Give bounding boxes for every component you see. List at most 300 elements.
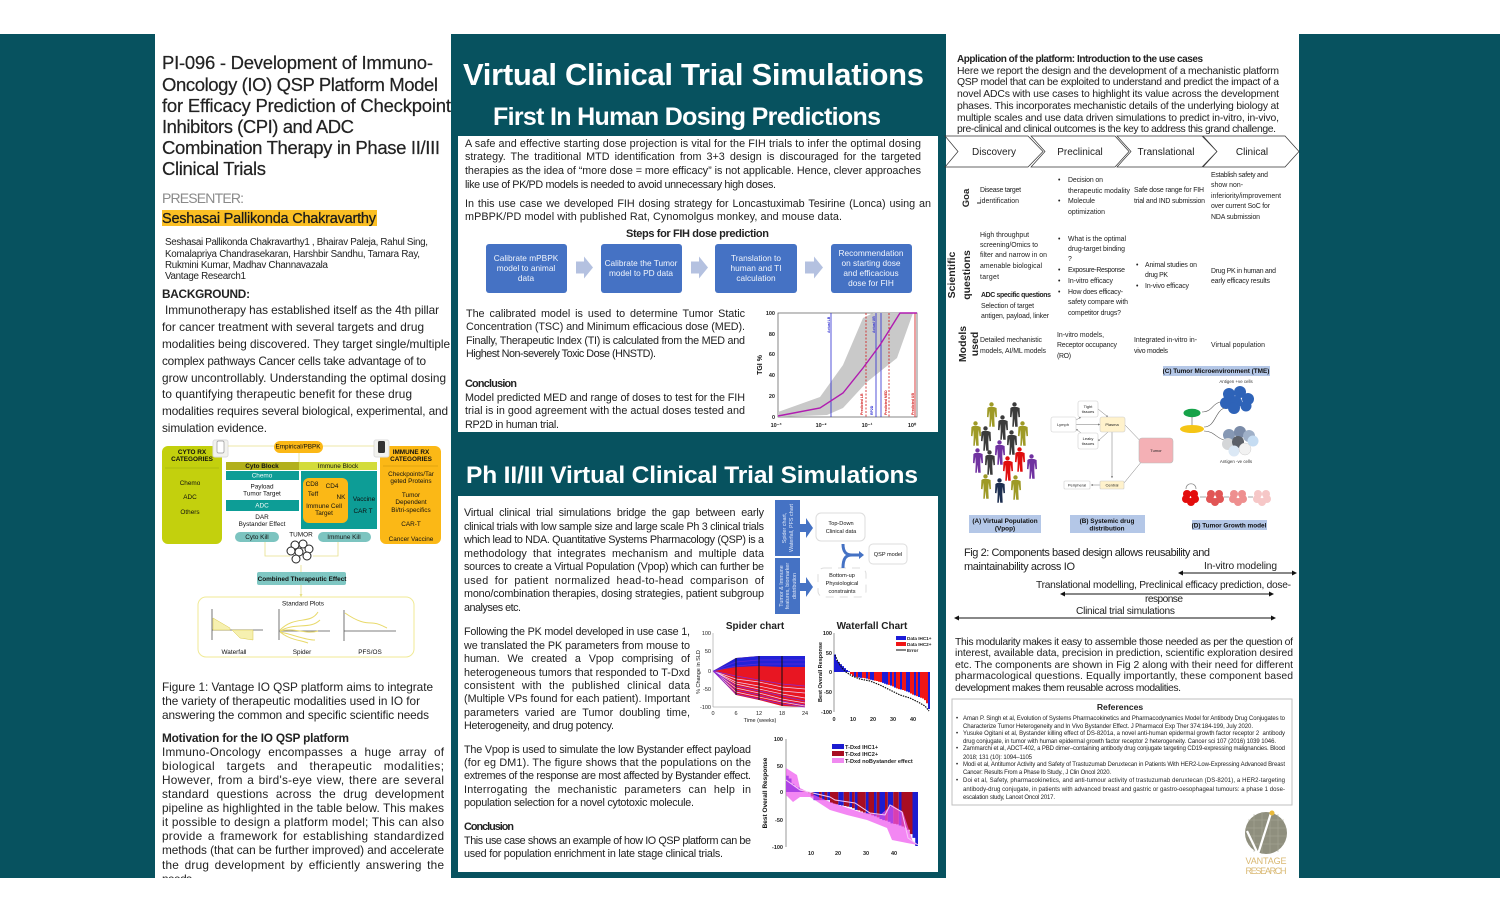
arrow (576, 256, 593, 278)
conclusion text: RP2D in human trial. (465, 419, 559, 431)
intro text: therapies as the idea of “more dose = more efficacy” is not applicable. Hence, clever approaches (465, 165, 922, 177)
row: models used (957, 326, 1265, 362)
row: models used: used (969, 332, 981, 356)
application text (957, 66, 1279, 135)
range: in-vitro modeling (1179, 561, 1296, 573)
row: scientific questions: In-vitro efficacy (1068, 278, 1114, 285)
chart: waterfall: 0 (832, 717, 836, 723)
row: scientific questions: questions (961, 250, 973, 300)
title: PI-096 - Development of Immuno- (162, 52, 433, 73)
logo: Vantage Research: VANTAGE (1246, 856, 1286, 866)
motivation text (162, 745, 445, 886)
step 2 (601, 244, 682, 293)
label B (1070, 515, 1145, 533)
chart: spider: % Change in SLD (696, 650, 702, 694)
chart: spider: 0 (708, 669, 711, 675)
cyto block: Cyto Block (245, 463, 279, 470)
chart: waterfall (818, 621, 932, 723)
PK model text: we translated the PK parameters from mouse to (463, 640, 690, 652)
motivation text: Immuno-Oncology encompasses a huge array of (162, 745, 445, 759)
sub heading: Ph II/III: Ph II/III Virtual Clinical Trial Simulations (466, 462, 918, 489)
label A: (A) Virtual Population (972, 518, 1038, 525)
references box: Yusuke Ogitani et al, Bystander killing effect of DS-8201a, a novel anti-human epidermal growth factor receptor 2 antibody (963, 731, 1285, 737)
bystander text: (for eg DM1). The figure shows that the populations on the (464, 757, 751, 769)
motivation text: the drug development by efficiently answering the (162, 858, 444, 872)
step 3: calculation (736, 273, 776, 283)
figure 1 caption (162, 680, 433, 722)
figure 1 caption: Figure 1: Vantage IO QSP platform aims to integrate (162, 680, 433, 694)
chart: TGI vs dose: 10⁻¹ (862, 422, 873, 429)
step 4: and efficacious (843, 268, 899, 278)
chart: bystander waterfall: 30 (863, 851, 869, 857)
row: scientific questions: early efficacy results (1211, 278, 1271, 285)
chart: TGI vs dose: Actual UB (872, 316, 876, 333)
application heading: Application of the platform: Introduction to the use cases (957, 54, 1203, 65)
references box: Doi et al, Safety, pharmacokinetics, and anti-tumour activity of trastuzumab deruxtecan (DS-8201), a HER2-targeting (963, 778, 1285, 784)
chart: TGI vs dose: Predicted UB (911, 393, 915, 415)
chart: bystander waterfall: 20 (835, 851, 841, 857)
chart: waterfall: Waterfall Chart (837, 621, 908, 632)
chevron: preclinical: Preclinical (1057, 147, 1103, 158)
modularity text: interest, available data, precision in prediction, scientific exploration desired (955, 648, 1293, 659)
references box (952, 699, 1292, 805)
row: scientific questions: screening/Omics to (980, 242, 1038, 249)
range: clinical trial simulations: Clinical trial simulations (1076, 606, 1175, 617)
references box: • (956, 716, 958, 722)
background text: modalities being discovered. They target single/multiple (162, 337, 450, 351)
cyto block: Bystander Effect (239, 521, 286, 528)
row: scientific questions: amenable biological (980, 263, 1042, 270)
row: scientific questions: • (1058, 267, 1061, 274)
references box: drug conjugate, in tumor with human epidermal growth factor receptor 2 heterogeneity. Cancer sci 107 (2016) 1039 1046. (963, 739, 1276, 745)
row: models used: Receptor occupancy (1057, 342, 1118, 349)
references box: antibody-drug conjugate, in patients with advanced breast and gastric or gastro-oesophageal tumours: a phase 1 dose- (963, 787, 1285, 793)
row: goal: • (1058, 198, 1061, 205)
label D: (D) Tumor Growth model (1192, 522, 1267, 530)
range: translational modelling: Translational modelling, Preclinical efficacy prediction, dose- (1036, 580, 1291, 591)
title: Oncology (IO) QSP Platform Model (162, 74, 438, 95)
chart: bystander waterfall: T-Dxd IHC1+ (845, 745, 879, 751)
conclusion text: trial is in good agreement with the actual doses tested and (465, 405, 745, 417)
bystander text: extremes of the response are most affected by Bystander effect. (464, 770, 751, 782)
label D (1192, 520, 1267, 530)
systemic distribution network: Tight (1084, 404, 1093, 409)
bystander text: Interrogating the mechanistic parameters can help in (464, 784, 751, 796)
spider mini plot (279, 609, 330, 656)
row: scientific questions: ADC specific questions (981, 292, 1051, 299)
chevron: discovery: Discovery (972, 147, 1016, 158)
chart: bystander waterfall: Best Overall Response (762, 757, 769, 828)
chart: spider: 100 (702, 631, 711, 637)
immune rx categories: geted Proteins (390, 478, 432, 485)
icon: immune drug bottle (374, 440, 389, 457)
row: scientific questions: Animal studies on (1145, 262, 1197, 269)
calibrated model text: The calibrated model is used to determine Tumor Static (466, 308, 746, 320)
flow: FIH dose steps (486, 244, 912, 293)
conclusion (464, 821, 751, 860)
conclusion text (465, 378, 745, 431)
vct intro text: used for patient normalized head-to-head comparison of (464, 575, 765, 587)
chevron: discovery (945, 136, 1043, 167)
vct intro text: analyses etc. (464, 602, 521, 614)
PK model text (463, 626, 691, 732)
chevron: translational (1117, 136, 1217, 167)
bystander text: The Vpop is used to simulate the low Bystander effect payload (464, 744, 751, 756)
cyto rx categories: CYTO RX (178, 449, 207, 456)
chart: bystander waterfall: -100 (772, 845, 783, 851)
chart: spider: 18 (779, 711, 785, 717)
empirical/PBPK pill (274, 441, 323, 453)
chart: TGI vs dose: 80 (769, 332, 775, 338)
PK model text: Heterogeneity, and drug potency. (464, 720, 614, 732)
row: scientific questions: How does efficacy- (1068, 289, 1123, 296)
immune rx categories: Bi/tri-specifics (391, 507, 431, 514)
calibrated model text: Concentration (TSC) and Minimum efficacious dose (MED). (466, 321, 745, 333)
figure 2 caption (964, 547, 1210, 573)
label B: distribution (1089, 526, 1125, 532)
presenter label: PRESENTER: (162, 190, 244, 206)
row: goal: Decision on (1068, 177, 1103, 184)
logo: Vantage Research (1245, 810, 1287, 876)
immune block: Immune Block (318, 463, 359, 470)
references box: escalation study, Lancet Oncol 2017. (963, 795, 1055, 801)
PK model text: (Multiple VPs found for each patient). Important (464, 693, 690, 705)
row: scientific questions: In-vivo efficacy (1145, 283, 1190, 290)
row: goal: Goa (961, 188, 972, 207)
modularity text: etc. The components are shown in Fig 2 along with their need for different (955, 660, 1293, 671)
arrow (691, 256, 708, 278)
systemic distribution network: Central (1106, 482, 1119, 488)
immune kill pill (318, 532, 371, 542)
intro text (465, 138, 931, 223)
vct intro text: sources to create a Virtual Population (Vpop) which can further be (464, 561, 764, 573)
row: scientific questions: filter and narrow in on (980, 252, 1047, 259)
chart: bystander waterfall: 10 (808, 851, 814, 857)
immune rx categories: Cancer Vaccine (389, 536, 434, 543)
modularity text (955, 637, 1293, 694)
chart: waterfall: Data IHC1+ (907, 636, 932, 641)
panel: first in human (458, 136, 938, 432)
row: goal: trial and IND submission (1134, 198, 1205, 205)
chart: TGI vs dose: Actual LB (827, 316, 831, 333)
diagram: top-down and bottom-up QSP: Physiological (826, 581, 858, 587)
row: scientific questions: Exposure-Response (1068, 267, 1125, 274)
vct intro text: Virtual clinical trial simulations bridge the gap between early (464, 507, 765, 519)
references box: Zammarchi et al, ADCT-402, a PBD dimer–containing antibody drug conjugate targeting CD19-expressing malignancies. Blood (963, 746, 1285, 752)
title: Clinical Trials (162, 158, 266, 179)
row: scientific questions: safety compare with (1068, 299, 1128, 306)
vct intro text (463, 507, 765, 614)
step 3: Translation to (731, 253, 781, 263)
label B: (B) Systemic drug (1080, 518, 1134, 525)
row: goal: Safe dose range for FIH (1134, 187, 1204, 194)
intro text: mPBPK/PD model with published Rat, Cynomolgus monkey, and mouse data. (465, 211, 842, 223)
chart: TGI vs dose: 10⁻² (816, 422, 827, 429)
step 3 (715, 244, 797, 293)
waterfall mini plot: Waterfall (222, 649, 246, 656)
row: scientific questions: target (980, 274, 999, 281)
figure 1 caption: the variety of therapeutic modalities used in IO for (162, 694, 420, 708)
icon: cyto drug bottle (213, 440, 228, 457)
row: goal: Disease target (980, 187, 1021, 194)
application text: pre-clinical and clinical outcomes is the key to address this grand challenge. (957, 124, 1276, 135)
step 1: model to animal (497, 263, 555, 273)
calibrated model text: Finally, Therapeutic Index (TI) is calculated from the MED and (466, 335, 745, 347)
references box: • (956, 778, 958, 784)
immune block (299, 462, 377, 529)
row: goal: Molecule (1068, 198, 1095, 205)
conclusion: Conclusion (464, 821, 514, 833)
systemic distribution network: Tumor (1150, 448, 1162, 453)
label A: (Vpop) (995, 526, 1015, 532)
authors: Vantage Research1 (165, 271, 246, 282)
modularity text: This modularity makes it easy to assemble those needed as per the question of (955, 637, 1293, 648)
logo: Vantage Research: RESEARCH (1246, 866, 1286, 876)
motivation text: biological targets and therapeutic modalities; (162, 759, 444, 773)
motivation heading: Motivation for the IO QSP platform (162, 731, 349, 745)
figure 1: platform diagram (162, 440, 441, 657)
label C: (C) Tumor Microenvironment (TME) (1163, 368, 1269, 375)
background text: complex pathways Cancer cells take advantage of to (162, 354, 426, 368)
row: models used: vivo models (1134, 348, 1169, 355)
diagram: top-down and bottom-up QSP: constraints (828, 589, 856, 595)
chart: TGI vs dose: Predicted MED (884, 390, 888, 415)
chart: TGI vs dose: 0 (772, 415, 775, 421)
references box: Characterize Tumor Heterogeneity and In Vivo Bystander Effect. J Pharmacol Exp Ther 374:184-199, July 2020. (963, 724, 1253, 730)
chart: TGI vs dose: 20 (769, 394, 775, 400)
intro text: A safe and effective starting dose projection is vital for the FIH trials to infer the optimal dosing (465, 138, 921, 150)
chart: bystander waterfall: 40 (891, 851, 897, 857)
vct intro text: methodology that integrates mechanism and multiple data (464, 548, 764, 560)
immune rx categories: Dependent (395, 499, 427, 506)
systemic distribution network: Plasma (1105, 422, 1119, 427)
panel: right column (945, 34, 1299, 878)
application text: phases. This incorporates mechanistic details of the underlying biology at (957, 101, 1279, 112)
range: translational modelling: response (1145, 594, 1183, 605)
PFS/OS mini plot: PFS/OS (358, 649, 382, 656)
row: scientific questions: Selection of target (981, 303, 1034, 310)
diagram: top-down and bottom-up QSP: Tumor & Immune (779, 565, 785, 607)
cyto block: DAR (255, 514, 269, 521)
chart: bystander waterfall (762, 737, 918, 857)
chart: bystander waterfall: T-Dxd noBystander effect (845, 759, 913, 765)
step 2: Calibrate the Tumor (605, 258, 678, 268)
standard plots: Standard Plots (282, 600, 324, 608)
step 4: on starting dose (841, 258, 901, 268)
tumor icon: TUMOR (289, 532, 313, 538)
tumor growth cells (1182, 484, 1271, 506)
row: goal: over current SoC for (1211, 203, 1271, 210)
immune block: Immune Cell (306, 503, 342, 510)
chart: waterfall: 30 (890, 717, 896, 723)
references box: References (1097, 702, 1143, 712)
cyto rx categories (162, 446, 222, 544)
step 1: Calibrate mPBPK (494, 253, 559, 263)
references box: • (956, 762, 958, 768)
chart: bystander waterfall: T-Dxd IHC2+ (845, 752, 879, 758)
chevron: clinical: Clinical (1236, 147, 1268, 158)
chart: spider: 50 (705, 649, 711, 655)
cyto rx categories: ADC (183, 494, 197, 501)
combined therapeutic effect (257, 572, 347, 585)
bystander text: population selection for a novel cytotoxic molecule. (464, 797, 694, 809)
row: goal (961, 172, 1281, 221)
spider mini plot: Spider (293, 649, 312, 656)
cyto block: Payload (250, 484, 274, 490)
tumor microenvironment: Antigen -ve cells (1220, 459, 1253, 464)
motivation text: standard questions across the drug development (162, 787, 445, 801)
application text: multiple scales and use data driven simulations to predict in-vitro, in-vivo, (957, 113, 1279, 124)
tumor microenvironment: Antigen +ve cells (1219, 379, 1253, 384)
application text: novel ADCs with use cases to highlight its value across the development (957, 89, 1279, 100)
row: goal: therapeutic modality (1068, 188, 1131, 195)
arrows to empirical pill (228, 446, 374, 462)
diagram: top-down and bottom-up QSP: Bottom-up (829, 573, 855, 579)
row: goal: show non- (1211, 182, 1243, 189)
row: models used: Integrated in-vitro in- (1134, 337, 1197, 344)
chart: waterfall: 10 (850, 717, 856, 723)
connector arrows (265, 542, 338, 597)
chart: waterfall: 50 (826, 651, 832, 657)
step 4: Recommendation (838, 248, 904, 258)
range: translational modelling (1036, 580, 1291, 605)
chart: spider: -100 (700, 705, 711, 711)
row: scientific questions: competitor drugs? (1068, 310, 1121, 317)
row: scientific questions: antigen, payload, linker (981, 313, 1050, 320)
chart: spider (696, 621, 808, 724)
PK model text: parameters varied are Tumor doubling time, (464, 707, 690, 719)
vct intro text: clinical trials with low sample size and large scale Ph 3 clinical trials (464, 521, 765, 533)
chart: spider: -50 (703, 687, 711, 693)
motivation text: methods (that can be further improved) and accelerate (162, 843, 444, 857)
cyto block: ADC (255, 502, 269, 510)
combined therapeutic effect: Combined Therapeutic Effect (258, 576, 347, 583)
chart: waterfall: 100 (823, 631, 832, 637)
chart: waterfall: -50 (824, 690, 832, 696)
chart: bystander waterfall: -50 (775, 818, 783, 824)
authors: Komalapriya Chandrasekaran, Harshbir Sandhu, Tamara Ray, (165, 249, 420, 260)
diagram: top-down and bottom-up QSP: Spider chart, (782, 512, 788, 543)
references box: • (956, 746, 958, 752)
chart: waterfall: -100 (821, 710, 832, 716)
step 3: human and TI (730, 263, 782, 273)
chart: TGI vs dose: RP2D (870, 405, 874, 415)
systemic distribution network: tissues (1082, 441, 1094, 446)
chart: spider: Spider chart (726, 621, 785, 632)
immune kill pill: Immune Kill (327, 534, 361, 541)
label A (969, 515, 1041, 533)
diagram: top-down and bottom-up QSP: features, biomarker (785, 563, 791, 609)
background text: simulation evidence. (162, 421, 267, 435)
chart: TGI vs dose: 40 (769, 373, 775, 379)
cyto kill pill: Cyto Kill (245, 534, 269, 541)
PK model text: human. We created a Vpop comprising of (464, 653, 691, 665)
immune block: Target (315, 510, 333, 517)
row: goal: identification (980, 198, 1019, 205)
chart: waterfall: 20 (870, 717, 876, 723)
immune rx categories: CATEGORIES (390, 456, 433, 463)
motivation text: However, from a bird's-eye view, there are several (162, 773, 444, 787)
row: scientific questions: • (1136, 283, 1139, 290)
row: scientific questions: High throughput (980, 232, 1029, 239)
references box: Cancer: Results From a Phase Ib Study., J Clin Oncol 2020. (963, 770, 1111, 776)
row: goal: Establish safety and (1211, 172, 1268, 179)
chart: bystander waterfall: 50 (777, 764, 783, 770)
diagram: top-down and bottom-up QSP: Clinical data (826, 529, 857, 535)
intro text: strategy. The traditional MTD identification from 3+3 design is discouraged for the targeted (465, 151, 921, 163)
immune rx categories: CAR-T (401, 521, 421, 528)
background text: for cancer treatment with several targets and drug (162, 320, 424, 334)
row: models used: Models (957, 326, 969, 362)
icon: virtual population people (971, 402, 1037, 503)
chart: spider: 12 (756, 711, 762, 717)
row: scientific questions: • (1058, 278, 1061, 285)
row: scientific questions: • (1058, 289, 1061, 296)
conclusion: used for population enrichment in late stage clinical trials. (464, 848, 723, 860)
systemic distribution network: tissues (1082, 409, 1094, 414)
application text: QSP model that can be exploited to understand and predict the impact of a (957, 77, 1279, 88)
step 2: model to PD data (609, 268, 673, 278)
intro text: like use of PK/PD models is needed to avoid unnecessary high doses. (465, 179, 776, 191)
PK model text: Following the PK model developed in use case 1, (464, 626, 690, 638)
motivation text: provide a framework for establishing standardized (162, 829, 444, 843)
cyto block: Tumor Target (243, 490, 281, 498)
modularity text: development makes them reusable across modalities. (955, 683, 1181, 694)
immune rx categories: Tumor (402, 492, 421, 499)
chart: waterfall: Error (907, 648, 918, 653)
row: scientific questions: ? (1068, 256, 1072, 263)
tumor icon (287, 532, 313, 563)
cyto block (226, 462, 299, 528)
title: for Efficacy Prediction of Checkpoint (162, 95, 451, 116)
calibrated model text (466, 308, 746, 360)
chart: TGI vs dose: 10⁰ (908, 422, 917, 429)
references box: • (956, 731, 958, 737)
row: goal: • (1058, 177, 1061, 184)
range: in-vitro modeling: In-vitro modeling (1204, 561, 1277, 572)
row: models used: models, AI/ML models (980, 348, 1047, 355)
row: models used: In-vitro models, (1057, 332, 1104, 339)
chevron: translational: Translational (1138, 147, 1194, 158)
bystander text (464, 744, 751, 809)
diagram: top-down and bottom-up QSP (775, 500, 907, 614)
references box: 2018; 131 (10): 1094–1105 (963, 755, 1033, 761)
panel: Ph II/III (458, 496, 938, 872)
chart: TGI vs dose (757, 311, 917, 429)
arrow (805, 256, 823, 278)
motivation text: pipeline as highlighted in the table below. This makes (162, 801, 444, 815)
figure 2 caption: Fig 2: Components based design allows reusability and (964, 547, 1210, 559)
vct intro text: mono/combination therapies, dosing strategies, patient subgroup (464, 588, 764, 600)
label C (1163, 366, 1270, 376)
row: goal: inferiority/improvement (1211, 193, 1281, 200)
chart: waterfall: 40 (910, 717, 916, 723)
diagram: top-down and bottom-up QSP: Waterfall, PFS chart (789, 503, 795, 552)
background heading: BACKGROUND: (162, 287, 250, 301)
immune rx categories (380, 446, 441, 544)
step 4: dose for FIH (848, 278, 894, 288)
step 4 (831, 244, 912, 293)
calibrated model text: Highest Non-severely Toxic Dose (HNSTD). (466, 348, 656, 360)
chart: spider: 0 (711, 711, 715, 717)
PFS/OS mini plot (344, 610, 396, 656)
chart: waterfall: Data IHC2+ (907, 642, 932, 647)
row: models used: Virtual population (1211, 342, 1265, 349)
background text: grow uncontrollably. Understanding the optimal dosing (162, 371, 446, 385)
systemic distribution network: Peripheral (1068, 482, 1086, 488)
chart: TGI vs dose: Predicted LB (860, 393, 864, 415)
row: models used: (RO) (1057, 353, 1071, 360)
